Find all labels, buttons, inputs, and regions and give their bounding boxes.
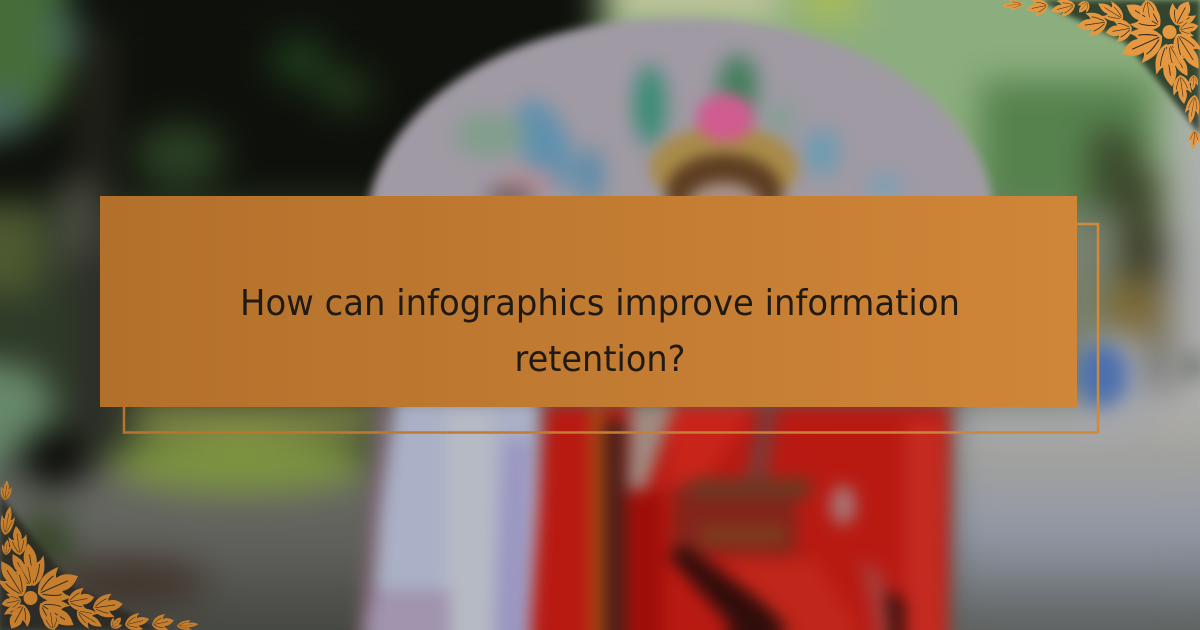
decorative offset frame xyxy=(124,224,1098,432)
title: How can infographics improve information xyxy=(240,283,960,324)
figure: robes xyxy=(358,400,950,630)
corner ornament: bottom left xyxy=(0,480,199,630)
figure: hat and hair xyxy=(650,94,798,234)
blue ball and distant objects xyxy=(1076,343,1200,407)
corner ornament: top right xyxy=(1001,0,1200,150)
title panel xyxy=(100,196,1077,407)
title: retention? xyxy=(514,339,686,380)
parasol painted motifs xyxy=(454,55,903,204)
background photo: parasol xyxy=(368,18,992,260)
